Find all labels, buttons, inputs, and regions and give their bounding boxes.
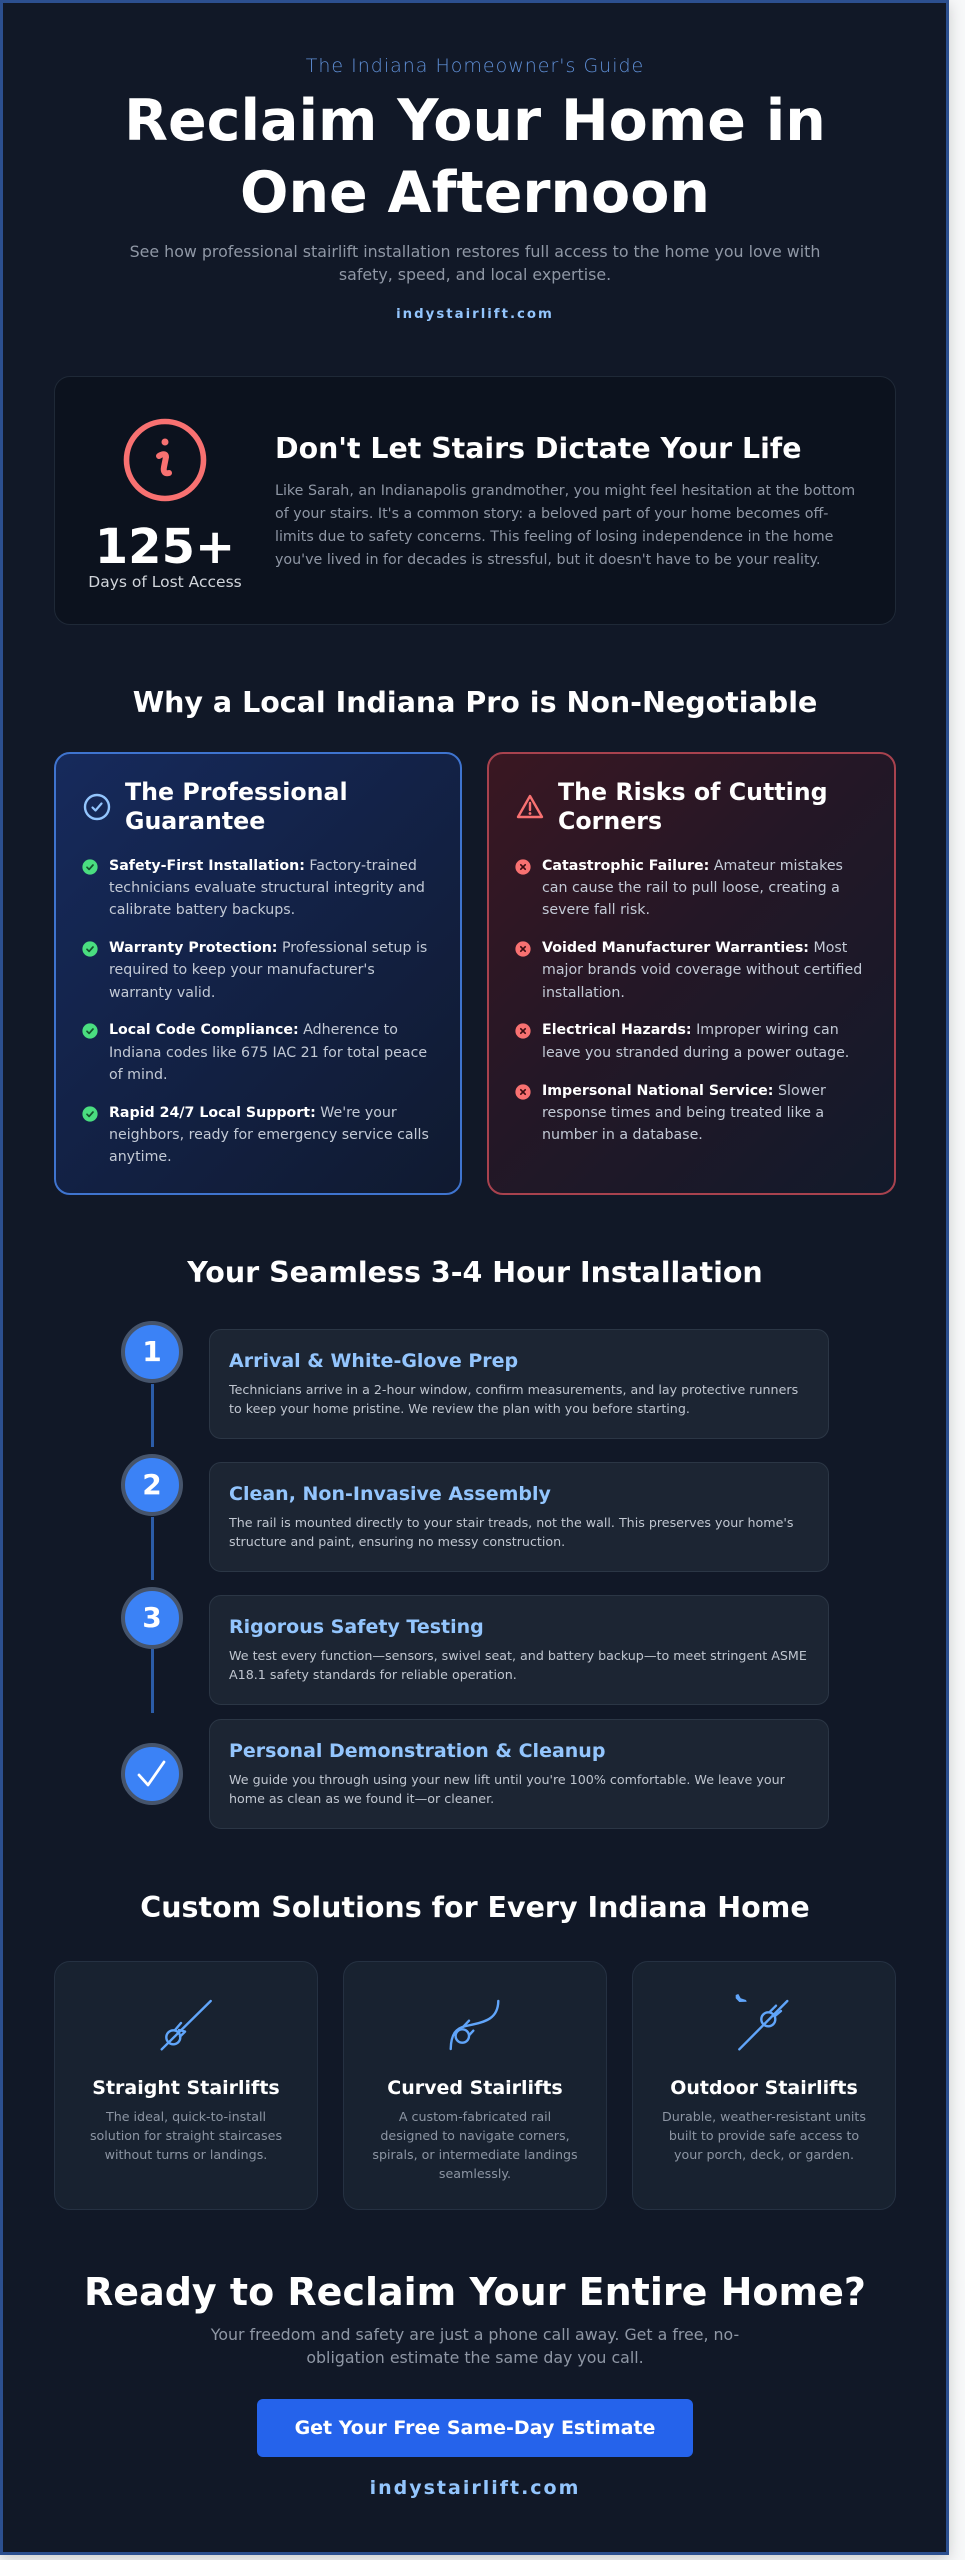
item text: number in a database. — [542, 1127, 703, 1143]
timeline — [121, 1321, 829, 1829]
story text: limits due to safety concerns. This feeling of losing independence in the home — [275, 529, 833, 545]
title: Reclaim Your Home in — [124, 88, 826, 154]
step text: A18.1 safety standards for reliable operation. — [229, 1667, 517, 1682]
step 4 marker — [121, 1743, 183, 1805]
icon: red cross — [515, 1023, 531, 1039]
card: curved stairlifts — [343, 1961, 607, 2210]
card text — [344, 2107, 606, 2183]
icon: green check — [82, 859, 98, 875]
risk list — [515, 858, 862, 1143]
benefit list — [82, 858, 429, 1165]
item text: leave you stranded during a power outage. — [542, 1045, 849, 1061]
card text: solution for straight staircases — [90, 2128, 282, 2143]
item text: Catastrophic Failure: Amateur mistakes — [542, 858, 843, 874]
item text: calibrate battery backups. — [109, 902, 295, 918]
step title: Rigorous Safety Testing — [229, 1616, 484, 1638]
item text: Impersonal National Service: Slower — [542, 1083, 826, 1099]
subtitle: safety, speed, and local expertise. — [339, 264, 611, 284]
step 4 card — [209, 1719, 829, 1829]
card text: A custom-fabricated rail — [399, 2109, 551, 2124]
card text — [633, 2107, 895, 2164]
step 3 marker: 3 — [142, 1601, 162, 1634]
card: outdoor stairlifts — [632, 1961, 896, 2210]
icon: red cross — [515, 941, 531, 957]
cta text — [0, 2324, 950, 2369]
card title: Curved Stairlifts — [387, 2077, 563, 2099]
list item — [515, 1022, 849, 1061]
step title: Personal Demonstration & Cleanup — [229, 1740, 605, 1762]
item text — [542, 858, 843, 918]
list item — [82, 1105, 429, 1165]
item text — [542, 940, 862, 1001]
step 2 marker — [121, 1454, 183, 1516]
icon: check mark — [138, 1760, 166, 1786]
icon: curved rail — [444, 1992, 514, 2052]
step text: The rail is mounted directly to your stair treads, not the wall. This preserves your home's — [229, 1515, 793, 1530]
item text: major brands void coverage without certified — [542, 962, 862, 978]
step 3 card — [209, 1595, 829, 1705]
step 1 marker: 1 — [142, 1335, 162, 1368]
icon: outdoor rail — [733, 1992, 803, 2052]
item text — [109, 940, 427, 1001]
icon: info circle — [124, 418, 206, 502]
card: straight stairlifts — [54, 1961, 318, 2210]
card text — [55, 2107, 317, 2164]
button: Get Your Free Same-Day Estimate — [295, 2417, 655, 2439]
item text — [109, 858, 425, 918]
subtitle: See how professional stairlift installation restores full access to the home you love with — [130, 242, 820, 261]
step 2 marker: 2 — [142, 1468, 162, 1501]
item text: Rapid 24/7 Local Support: We're your — [109, 1105, 397, 1121]
cta text: Your freedom and safety are just a phone call away. Get a free, no- — [211, 2325, 739, 2344]
card text: seamlessly. — [439, 2166, 511, 2181]
connector 1 — [150, 1384, 154, 1447]
title — [124, 88, 826, 226]
button — [257, 2399, 693, 2457]
story heading: Don't Let Stairs Dictate Your Life — [275, 432, 801, 465]
card title: Straight Stairlifts — [92, 2077, 280, 2099]
list item — [515, 940, 862, 1001]
icon: green check — [82, 941, 98, 957]
list item — [515, 1083, 826, 1143]
heading: local pro: Why a Local Indiana Pro is Non-Negotiable — [133, 686, 817, 719]
item text: Electrical Hazards: Improper wiring can — [542, 1022, 839, 1038]
item text: anytime. — [109, 1149, 172, 1165]
item text: Warranty Protection: Professional setup is — [109, 940, 427, 956]
call to action — [0, 2260, 950, 2510]
eyebrow: The Indiana Homeowner's Guide — [306, 55, 644, 77]
item text: severe fall risk. — [542, 902, 650, 918]
card text: Durable, weather-resistant units — [662, 2109, 866, 2124]
stat number: 125+ — [95, 519, 235, 575]
story text: Like Sarah, an Indianapolis grandmother, you might feel hesitation at the bottom — [275, 483, 855, 499]
panel heading — [125, 778, 348, 835]
connector 2 — [150, 1517, 154, 1580]
item text: warranty valid. — [109, 985, 215, 1001]
step text: home as clean as we found it—or cleaner. — [229, 1791, 494, 1806]
site link: indystairlift.com — [396, 307, 554, 322]
step 3 marker — [121, 1587, 183, 1649]
step 1 card — [209, 1329, 829, 1439]
item text: Indiana codes like 675 IAC 21 for total peace — [109, 1045, 427, 1061]
item text: of mind. — [109, 1067, 167, 1083]
story text: of your stairs. It's a common story: a beloved part of your home becomes off- — [275, 506, 828, 522]
card text: built to provide safe access to — [669, 2128, 859, 2143]
panel: professional guarantee — [54, 752, 462, 1195]
step text: structure and paint, ensuring no messy construction. — [229, 1534, 565, 1549]
title: One Afternoon — [240, 160, 710, 226]
item text: required to keep your manufacturer's — [109, 962, 375, 978]
icon: shield check — [84, 794, 110, 820]
card text: your porch, deck, or garden. — [674, 2147, 854, 2162]
list item — [82, 858, 425, 918]
item text: can cause the rail to pull loose, creating a — [542, 880, 840, 896]
story text: you've lived in for decades is stressful, but it doesn't have to be your reality. — [275, 552, 820, 568]
item text: response times and being treated like a — [542, 1105, 824, 1121]
panel heading: Corners — [558, 807, 662, 835]
step text — [228, 1382, 798, 1416]
heading: installation: Your Seamless 3-4 Hour Installation — [187, 1256, 763, 1289]
item text: Safety-First Installation: Factory-trained — [109, 858, 417, 874]
icon: red cross — [515, 859, 531, 875]
step text: Technicians arrive in a 2-hour window, confirm measurements, and lay protective runners — [229, 1382, 798, 1397]
panel: lost access story — [54, 376, 896, 625]
panel heading — [558, 778, 828, 835]
step 2 card — [209, 1462, 829, 1572]
list item — [515, 858, 843, 918]
heading: custom solutions: Custom Solutions for Every Indiana Home — [140, 1891, 810, 1924]
icon: green check — [82, 1106, 98, 1122]
stat label: Days of Lost Access — [88, 573, 242, 591]
step text: We guide you through using your new lift until you're 100% comfortable. We leave your — [229, 1772, 785, 1787]
card text: designed to navigate corners, — [380, 2128, 570, 2143]
icon: straight rail — [155, 1992, 225, 2052]
item text: technicians evaluate structural integrity and — [109, 880, 425, 896]
cta heading: Ready to Reclaim Your Entire Home? — [84, 2270, 866, 2314]
icon: warning triangle — [516, 794, 544, 818]
subtitle — [130, 242, 820, 284]
item text: Local Code Compliance: Adherence to — [109, 1022, 398, 1038]
step text — [229, 1648, 807, 1682]
icon: green check — [82, 1023, 98, 1039]
header — [124, 55, 826, 322]
panel: risks of cutting corners — [487, 752, 896, 1195]
list item — [82, 940, 427, 1001]
item text — [109, 1022, 427, 1083]
card title: Outdoor Stairlifts — [670, 2077, 858, 2099]
item text — [109, 1105, 429, 1165]
item text: neighbors, ready for emergency service calls — [109, 1127, 429, 1143]
card text: spirals, or intermediate landings — [372, 2147, 578, 2162]
item text — [542, 1022, 849, 1061]
item text: installation. — [542, 985, 625, 1001]
step text: to keep your home pristine. We review the plan with you before starting. — [229, 1401, 690, 1416]
step text — [228, 1515, 793, 1549]
step text — [229, 1770, 785, 1808]
panel heading: The Professional — [125, 778, 348, 806]
item text: Voided Manufacturer Warranties: Most — [542, 940, 847, 956]
step title: Clean, Non-Invasive Assembly — [229, 1483, 551, 1505]
step 1 marker — [121, 1321, 183, 1383]
panel heading: Guarantee — [125, 807, 265, 835]
story text — [275, 483, 855, 568]
card text: The ideal, quick-to-install — [106, 2109, 266, 2124]
cta text: obligation estimate the same day you call. — [306, 2348, 644, 2366]
card text: without turns or landings. — [105, 2147, 267, 2162]
item text — [542, 1083, 826, 1143]
site link: indystairlift.com — [370, 2477, 580, 2499]
connector 3 — [150, 1649, 154, 1713]
step title: Arrival & White-Glove Prep — [229, 1350, 518, 1372]
list item — [82, 1022, 427, 1083]
step text: We test every function—sensors, swivel seat, and battery backup—to meet stringent ASME — [229, 1648, 807, 1663]
panel heading: The Risks of Cutting — [558, 778, 828, 806]
icon: red cross — [515, 1084, 531, 1100]
